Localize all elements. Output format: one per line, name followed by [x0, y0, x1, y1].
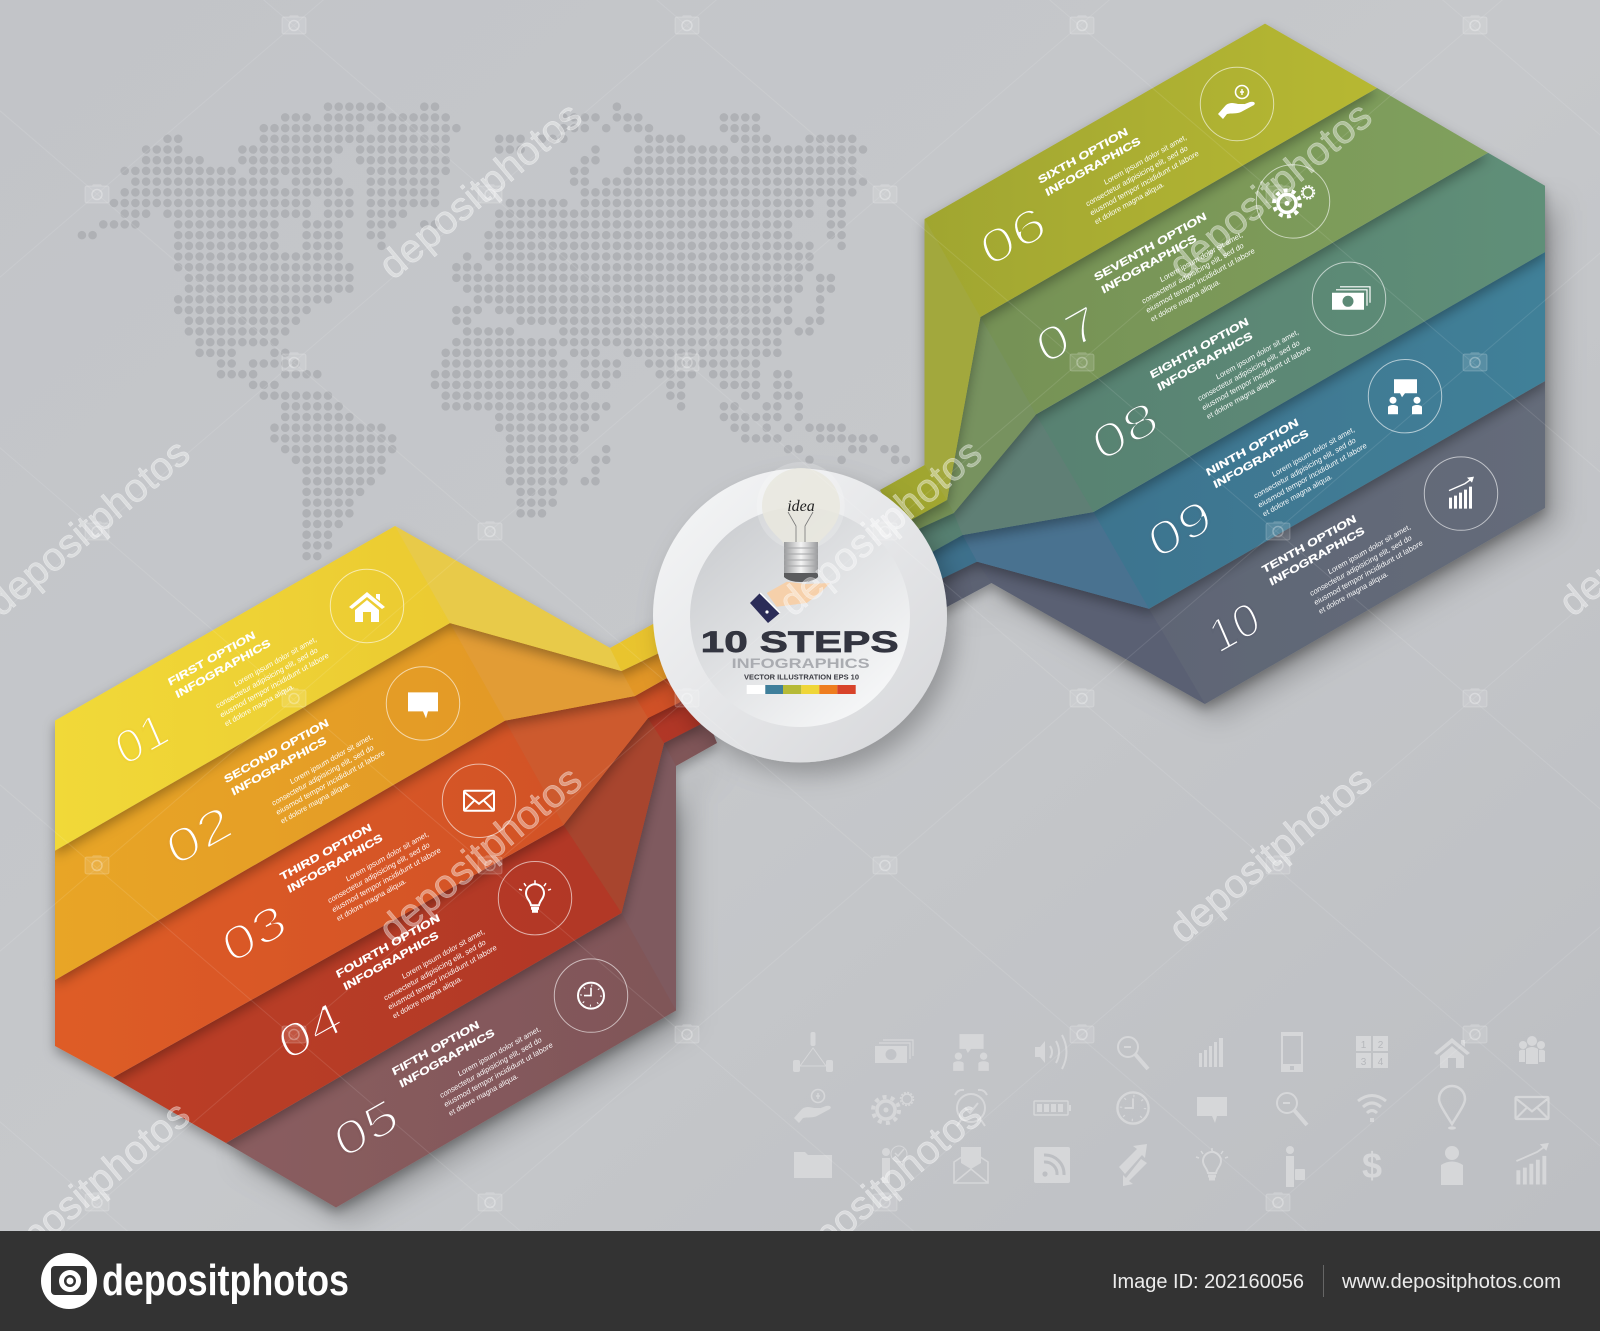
heading 05: INFOGRAPHICS	[398, 1027, 497, 1091]
band 02	[55, 623, 685, 980]
body 04: Lorem ipsum dolor sit amet,	[401, 927, 486, 981]
right group ground shadow	[959, 199, 1557, 718]
step 01 text	[101, 600, 334, 783]
number 10: 10	[1201, 590, 1267, 664]
number 01: 01	[107, 701, 176, 776]
icon: speech bubble	[386, 667, 460, 740]
heading 09: INFOGRAPHICS	[1212, 427, 1311, 491]
body 02	[267, 730, 390, 826]
body 05: eiusmod tempor incididunt ut labore	[443, 1040, 554, 1109]
number 08: 08	[1084, 390, 1166, 472]
heading 04: FOURTH OPTION	[334, 912, 442, 981]
heading 04: INFOGRAPHICS	[342, 929, 441, 993]
body 07: consectetur adipisicing elit, sed do	[1141, 241, 1245, 306]
body 08: et dolore magna aliqua.	[1205, 374, 1278, 421]
world map	[82, 107, 907, 556]
site url: www.depositphotos.com	[1341, 1271, 1561, 1293]
heading 09: NINTH OPTION	[1204, 416, 1301, 479]
body 03	[323, 827, 446, 924]
body 08: eiusmod tempor incididunt ut labore	[1201, 343, 1312, 412]
body 05: et dolore magna aliqua.	[447, 1071, 520, 1118]
step 04	[264, 862, 572, 1078]
small icon set: 4	[1378, 1057, 1384, 1068]
heading 03: THIRD OPTION	[278, 822, 374, 884]
number 06: 06	[972, 195, 1054, 277]
inner disc	[690, 507, 910, 727]
title: 10 STEPS: 10 STEPS	[701, 626, 899, 659]
watermark: depositphotos text: depositphotos	[1161, 757, 1380, 952]
heading 09	[1204, 414, 1311, 492]
body 07	[1137, 228, 1260, 324]
left group ground shadow	[238, 757, 729, 1221]
number 03: 03	[214, 893, 294, 974]
number 05: 05	[326, 1088, 406, 1169]
body 10: consectetur adipisicing elit, sed do	[1309, 533, 1413, 598]
heading 06: SIXTH OPTION	[1036, 126, 1130, 187]
heading 01	[166, 624, 273, 702]
colour strip	[747, 685, 856, 694]
number 04: 04	[270, 990, 350, 1071]
centre badge	[653, 462, 947, 762]
icon: idea bulb: idea	[787, 498, 815, 515]
body 07: eiusmod tempor incididunt ut labore	[1145, 246, 1256, 315]
body 09: consectetur adipisicing elit, sed do	[1253, 436, 1357, 501]
panel: right hexagon bands	[880, 24, 1545, 704]
watermark: depositphotos text: depositphotos	[771, 430, 990, 625]
subtitle: INFOGRAPHICS: INFOGRAPHICS	[732, 655, 870, 671]
body 03: eiusmod tempor incididunt ut labore	[331, 845, 442, 914]
body 07: Lorem ipsum dolor sit amet,	[1159, 230, 1244, 284]
step 05 text	[320, 990, 558, 1175]
icon: people talking	[1368, 360, 1442, 433]
body 02: Lorem ipsum dolor sit amet,	[289, 732, 374, 786]
step 06	[966, 67, 1274, 283]
step 10 text	[1195, 488, 1428, 670]
icon: gears	[1256, 165, 1330, 238]
icon: home	[330, 569, 404, 643]
body 05: Lorem ipsum dolor sit amet,	[457, 1024, 542, 1078]
body 08: consectetur adipisicing elit, sed do	[1197, 338, 1301, 403]
step 02	[152, 667, 460, 883]
watermark: depositphotos text: depositphotos	[371, 757, 590, 952]
heading 02: INFOGRAPHICS	[230, 735, 329, 798]
band 04	[113, 700, 705, 1143]
icon: money	[1312, 262, 1386, 335]
step 03 text	[208, 795, 446, 980]
body 09: et dolore magna aliqua.	[1261, 472, 1334, 519]
body 02: consectetur adipisicing elit, sed do	[271, 743, 375, 808]
outer disc	[653, 468, 947, 762]
body 01	[211, 632, 334, 729]
band 03	[55, 678, 695, 1078]
step 07 text	[1022, 195, 1260, 381]
body 01: eiusmod tempor incididunt ut labore	[219, 651, 330, 720]
body 06: et dolore magna aliqua.	[1093, 179, 1166, 226]
body 05	[435, 1022, 558, 1118]
heading 10: INFOGRAPHICS	[1268, 525, 1367, 589]
heading 08: EIGHTH OPTION	[1148, 316, 1251, 382]
body 03: et dolore magna aliqua.	[335, 876, 408, 923]
footer logo icon	[41, 1253, 97, 1309]
body 08	[1193, 325, 1316, 422]
body 09: Lorem ipsum dolor sit amet,	[1271, 425, 1356, 479]
heading 06	[1036, 122, 1143, 200]
body 10: eiusmod tempor incididunt ut labore	[1313, 538, 1424, 607]
body 10	[1305, 520, 1428, 616]
heading 01: INFOGRAPHICS	[174, 637, 273, 701]
body 01: et dolore magna aliqua.	[223, 681, 296, 728]
footer logo wordmark: depositphotos	[102, 1256, 349, 1305]
body 03: Lorem ipsum dolor sit amet,	[345, 829, 430, 884]
body 04	[379, 924, 502, 1021]
heading 04	[334, 912, 448, 994]
body 09	[1249, 422, 1372, 519]
band 07	[900, 88, 1488, 538]
step 08	[1078, 262, 1386, 478]
number 02: 02	[158, 794, 240, 876]
icon: growth chart	[1424, 457, 1498, 530]
heading 07: INFOGRAPHICS	[1100, 233, 1199, 296]
heading 10: TENTH OPTION	[1260, 513, 1358, 576]
body 08: Lorem ipsum dolor sit amet,	[1215, 327, 1300, 382]
icon: idea bulb	[757, 462, 845, 582]
number 07: 07	[1028, 294, 1106, 374]
body 10: et dolore magna aliqua.	[1317, 569, 1390, 616]
band 05	[226, 700, 717, 1208]
icon: hand with coin	[1200, 67, 1274, 141]
body 01: Lorem ipsum dolor sit amet,	[233, 634, 318, 689]
icon: envelope	[442, 764, 516, 838]
icon: hand holding bulb	[750, 582, 830, 623]
body 02: eiusmod tempor incididunt ut labore	[275, 748, 386, 817]
step 08 text	[1078, 293, 1316, 478]
heading 03: INFOGRAPHICS	[286, 832, 385, 896]
watermark: depositphotos text: depositphotos	[1161, 93, 1380, 288]
icon: clock	[554, 959, 628, 1032]
panel: left hexagon bands	[55, 526, 717, 1208]
watermark: depositphotos text: depositphotos	[771, 1092, 990, 1287]
body 06: consectetur adipisicing elit, sed do	[1085, 143, 1189, 208]
body 09: eiusmod tempor incididunt ut labore	[1257, 441, 1368, 510]
heading 01: FIRST OPTION	[166, 629, 257, 689]
small icon set: 3	[1361, 1057, 1367, 1068]
body 03: consectetur adipisicing elit, sed do	[327, 840, 431, 905]
step 07	[1022, 165, 1330, 381]
band 09	[925, 252, 1545, 609]
heading 08	[1148, 316, 1256, 395]
step 09 text	[1134, 390, 1372, 576]
band 01	[55, 526, 675, 851]
heading 07	[1092, 210, 1214, 297]
small icon set: 1	[1361, 1040, 1367, 1051]
heading 05	[390, 1013, 497, 1092]
body 06: Lorem ipsum dolor sit amet,	[1103, 132, 1188, 187]
step 01	[101, 569, 404, 783]
heading 07: SEVENTH OPTION	[1092, 210, 1209, 284]
small icon set: 2	[1378, 1040, 1384, 1051]
step 02 text	[152, 697, 390, 883]
band 06	[880, 24, 1377, 526]
heading 02	[222, 717, 336, 799]
watermark: repeated cameras	[85, 15, 1487, 1211]
caption: VECTOR ILLUSTRATION EPS 10	[744, 674, 859, 682]
band 08	[905, 153, 1545, 556]
body 06: eiusmod tempor incididunt ut labore	[1089, 149, 1200, 218]
step 06 text	[966, 98, 1204, 283]
heading 08: INFOGRAPHICS	[1156, 330, 1255, 394]
body 10: Lorem ipsum dolor sit amet,	[1327, 522, 1412, 576]
number 09: 09	[1140, 488, 1220, 569]
step 04 text	[264, 892, 502, 1078]
body 04: et dolore magna aliqua.	[391, 974, 464, 1021]
heading 05: FIFTH OPTION	[390, 1019, 481, 1078]
body 06	[1081, 130, 1204, 227]
icon: light bulb	[498, 862, 572, 935]
image id: Image ID: 202160056	[1112, 1271, 1304, 1293]
footer bar	[0, 1231, 1600, 1331]
watermark: depositphotos text: depositphotos	[371, 93, 590, 288]
step 10	[1195, 457, 1498, 670]
heading 06: INFOGRAPHICS	[1044, 135, 1143, 199]
body 07: et dolore magna aliqua.	[1149, 277, 1222, 324]
body 04: consectetur adipisicing elit, sed do	[383, 938, 487, 1003]
band 10	[925, 381, 1545, 704]
step 05	[320, 959, 628, 1175]
body 05: consectetur adipisicing elit, sed do	[439, 1035, 543, 1100]
heading 03	[278, 819, 385, 897]
heading 10	[1260, 511, 1367, 590]
body 01: consectetur adipisicing elit, sed do	[215, 645, 319, 710]
small icon set: $	[1362, 1145, 1382, 1186]
small icon set	[793, 1032, 1549, 1187]
body 02: et dolore magna aliqua.	[279, 779, 352, 826]
step 03	[208, 764, 516, 980]
body 04: eiusmod tempor incididunt ut labore	[387, 943, 498, 1012]
heading 02: SECOND OPTION	[222, 717, 331, 786]
step 09	[1134, 360, 1442, 576]
